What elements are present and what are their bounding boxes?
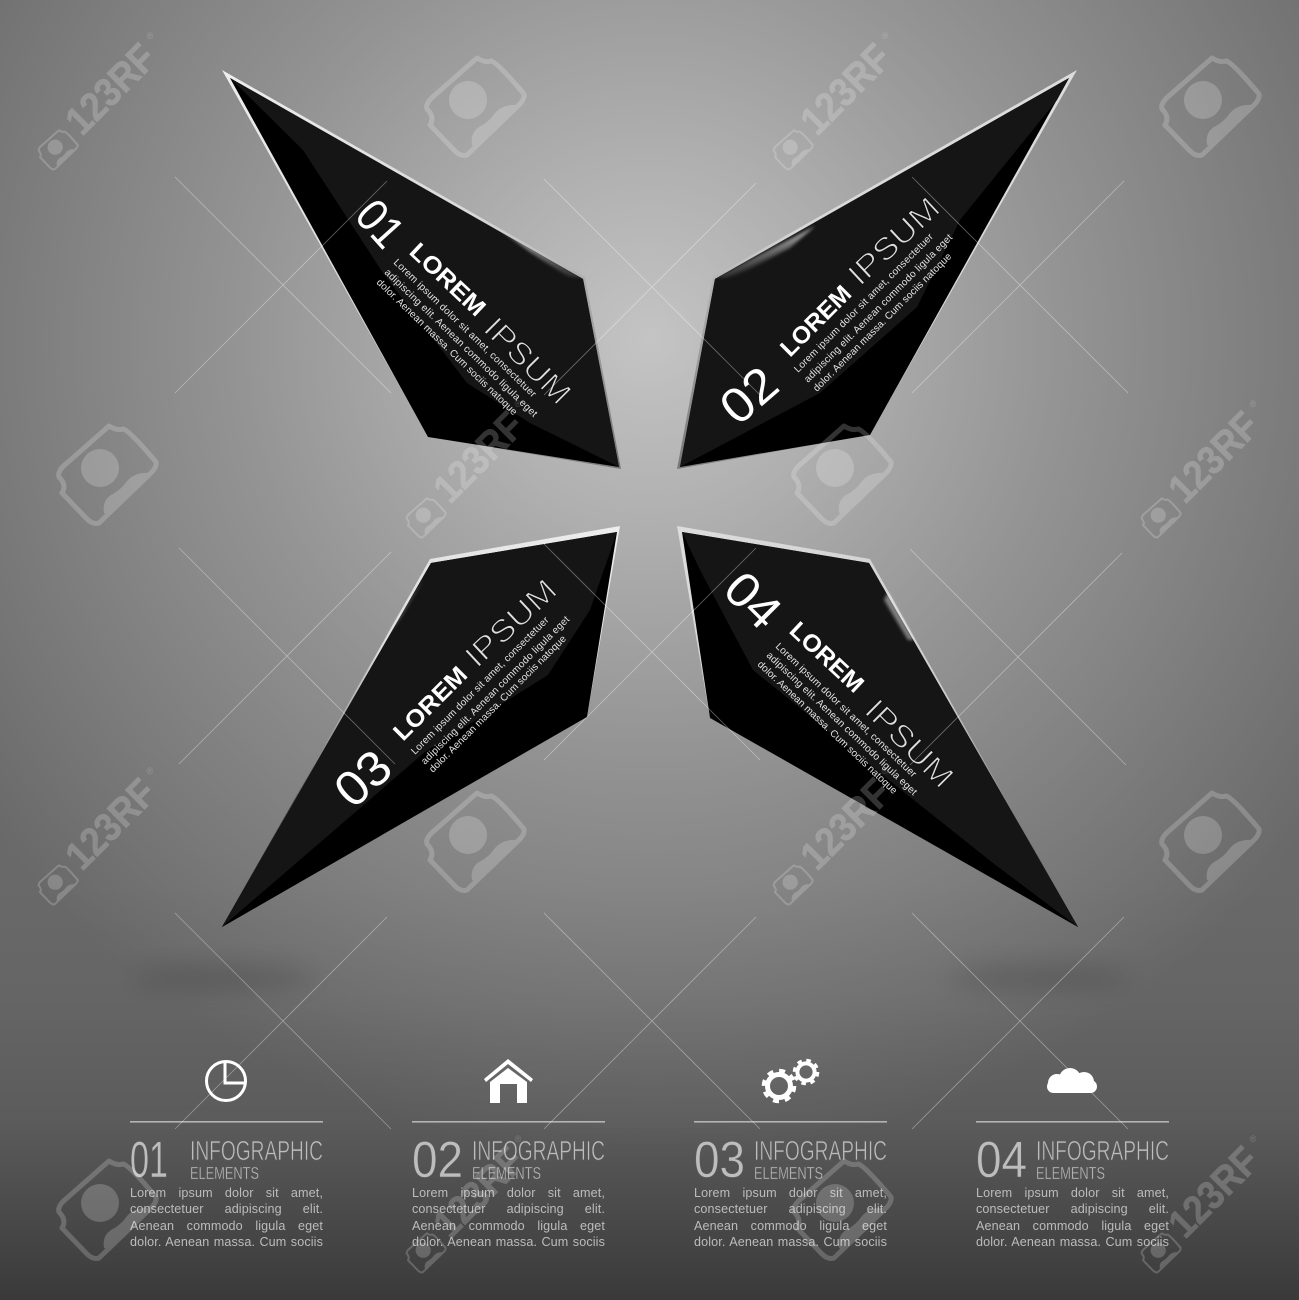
column 04 header: 04	[976, 1131, 1027, 1188]
icon: gears	[764, 1060, 818, 1101]
column 01 text: consectetuer adipiscing elit.	[130, 1202, 323, 1216]
heading: lorem ipsum 01: LOREM	[404, 238, 491, 322]
body text 02: adipiscing elit. Aenean commodo ligula eget	[802, 232, 955, 385]
body text 03: adipiscing elit. Aenean commodo ligula eget	[419, 614, 572, 767]
column 04 text: Aenean commodo ligula eget	[976, 1219, 1169, 1233]
panel: arrow 01	[222, 70, 621, 469]
column 02 header	[412, 1121, 605, 1188]
column 01 text: dolor. Aenean massa. Cum sociis	[130, 1235, 323, 1249]
panel: arrow 03	[222, 526, 620, 927]
heading: lorem ipsum 04: IPSUM	[858, 692, 961, 795]
column 01 header: INFOGRAPHIC	[190, 1135, 323, 1166]
column 01 header: ELEMENTS	[190, 1163, 259, 1183]
column 03 header: ELEMENTS	[754, 1163, 823, 1183]
column 02 text: consectetuer adipiscing elit.	[412, 1202, 605, 1216]
column 03 header: INFOGRAPHIC	[754, 1135, 887, 1166]
column 02 text: dolor. Aenean massa. Cum sociis	[412, 1235, 605, 1249]
number 03: 03	[324, 740, 403, 818]
column 01 text: Lorem ipsum dolor sit amet,	[130, 1186, 323, 1200]
number 02: 02	[710, 356, 789, 435]
icon: cloud	[1047, 1068, 1097, 1093]
column 02 text: Aenean commodo ligula eget	[412, 1219, 605, 1233]
floor shading	[0, 880, 1299, 1300]
heading: lorem ipsum 01	[404, 238, 578, 411]
column 04 text: consectetuer adipiscing elit.	[976, 1202, 1169, 1216]
heading: lorem ipsum 02	[775, 190, 947, 362]
body text 04: dolor. Aenean massa. Cum sociis natoque	[755, 659, 899, 797]
panel: arrow 04	[677, 526, 1078, 927]
floor shadow	[135, 965, 1130, 989]
column 03 text: Aenean commodo ligula eget	[694, 1219, 887, 1233]
heading: lorem ipsum 02: LOREM	[775, 280, 857, 362]
number 01: 01	[346, 189, 415, 258]
icon: house	[484, 1059, 533, 1103]
body text 04: adipiscing elit. Aenean commodo ligula eget	[764, 650, 919, 798]
column 03 header	[694, 1121, 887, 1188]
column 04 text: Lorem ipsum dolor sit amet,	[976, 1186, 1169, 1200]
guide crosses	[175, 177, 1128, 1129]
heading: lorem ipsum 04	[784, 617, 961, 795]
column 03 header: 03	[694, 1131, 745, 1188]
body text 01: adipiscing elit. Aenean commodo ligula eget	[382, 267, 539, 420]
heading: lorem ipsum 03	[388, 572, 564, 746]
column 01 header	[130, 1121, 323, 1188]
column 02 text	[412, 1186, 605, 1249]
heading: lorem ipsum 03: LOREM	[388, 661, 473, 746]
column 03 text: consectetuer adipiscing elit.	[694, 1202, 887, 1216]
body text 02: dolor. Aenean massa. Cum sociis natoque	[811, 251, 954, 394]
body text 03: Lorem ipsum dolor sit amet, consectetuer	[409, 615, 552, 757]
column 01 header: 01	[130, 1131, 168, 1188]
column 03 text	[694, 1186, 887, 1249]
body text 01: Lorem ipsum dolor sit amet, consectetuer	[391, 257, 539, 400]
column 02 header: INFOGRAPHIC	[472, 1135, 605, 1166]
column 01 text: Aenean commodo ligula eget	[130, 1219, 323, 1233]
body text 03: dolor. Aenean massa. Cum sociis natoque	[427, 633, 569, 775]
column 03 text: Lorem ipsum dolor sit amet,	[694, 1186, 887, 1200]
heading: lorem ipsum 04: LOREM	[784, 617, 869, 698]
heading: lorem ipsum 01: IPSUM	[477, 310, 578, 411]
icon: pie chart	[206, 1062, 246, 1100]
column 02 header: ELEMENTS	[472, 1163, 541, 1183]
column 01 text	[130, 1186, 323, 1249]
column 04 header: ELEMENTS	[1036, 1163, 1105, 1183]
body text 02: Lorem ipsum dolor sit amet, consectetuer	[792, 231, 936, 375]
body text 01: dolor. Aenean massa. Cum sociis natoque	[374, 277, 519, 418]
heading: lorem ipsum 03: IPSUM	[458, 572, 564, 674]
column 02 header: 02	[412, 1131, 463, 1188]
column 04 text	[976, 1186, 1169, 1249]
heading: lorem ipsum 02: IPSUM	[841, 190, 947, 292]
panel: arrow 02	[677, 70, 1077, 469]
column 04 header	[976, 1121, 1169, 1188]
column 02 text: Lorem ipsum dolor sit amet,	[412, 1186, 605, 1200]
column 04 text: dolor. Aenean massa. Cum sociis	[976, 1235, 1169, 1249]
column 03 text: dolor. Aenean massa. Cum sociis	[694, 1235, 887, 1249]
column 04 header: INFOGRAPHIC	[1036, 1135, 1169, 1166]
body text 04: Lorem ipsum dolor sit amet, consectetuer	[773, 641, 919, 780]
number 04: 04	[713, 562, 792, 640]
